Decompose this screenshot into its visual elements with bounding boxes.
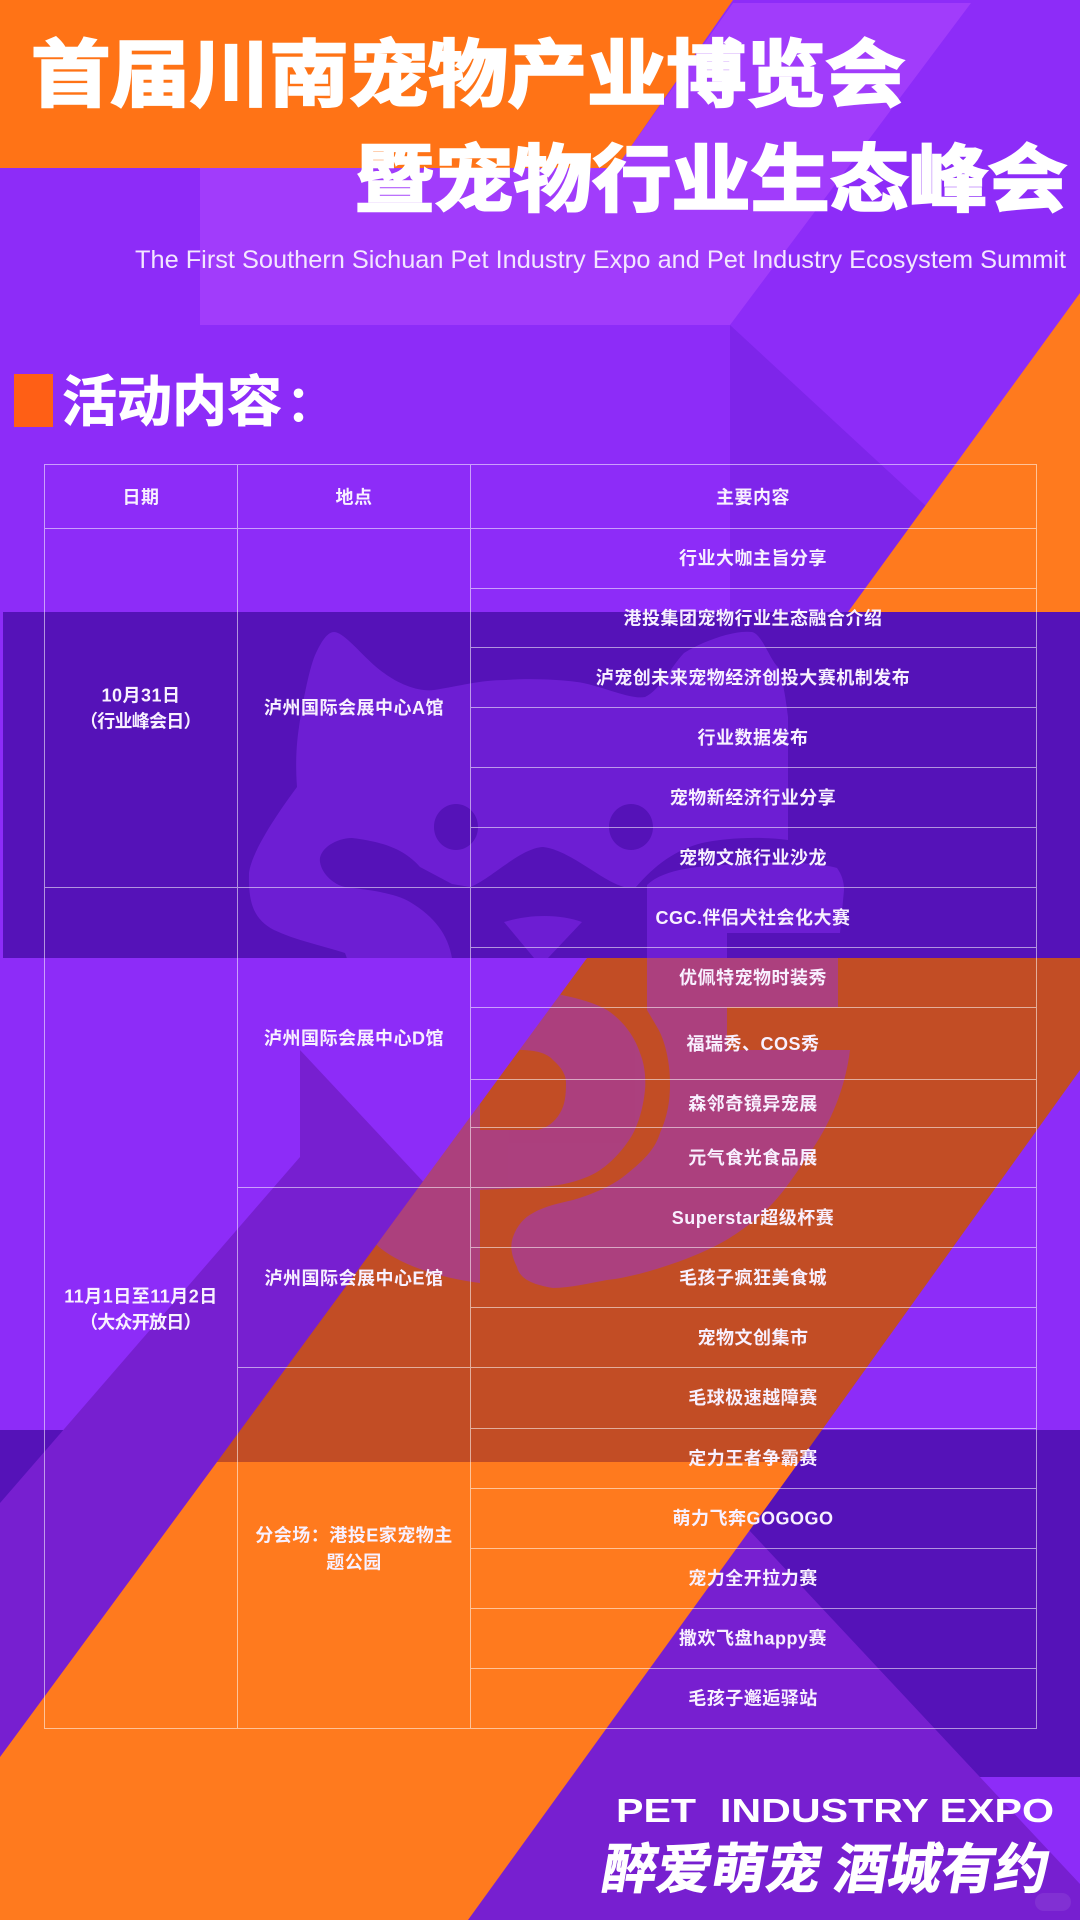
main content column xyxy=(596,548,910,1708)
main content column: 泸宠创未来宠物经济创投大赛机制发布 xyxy=(596,667,910,688)
main content column: 元气食光食品展 xyxy=(688,1147,818,1168)
table grid xyxy=(44,464,1036,1728)
header row: 主要内容 xyxy=(716,486,790,508)
main content column: 宠物文旅行业沙龙 xyxy=(679,847,827,868)
main content column: 毛球极速越障赛 xyxy=(688,1387,818,1408)
title xyxy=(31,35,1067,221)
main content column: 港投集团宠物行业生态融合介绍 xyxy=(624,608,882,628)
main content column: 森邻奇镜异宠展 xyxy=(688,1093,818,1114)
footer chinese slogan xyxy=(598,1839,1055,1900)
main content column: CGC.伴侣犬社会化大赛 xyxy=(656,907,850,928)
date column: （行业峰会日） xyxy=(80,712,202,732)
main content column: 撒欢飞盘happy赛 xyxy=(679,1628,827,1648)
main content column: 行业数据发布 xyxy=(698,727,808,748)
main content column: 优佩特宠物时装秀 xyxy=(679,967,827,988)
main content column: 定力王者争霸赛 xyxy=(688,1448,818,1468)
date column: （大众开放日） xyxy=(80,1312,202,1332)
footer english slogan: PET INDUSTRY EXPO xyxy=(616,1792,1054,1829)
venue column: 泸州国际会展中心A馆 xyxy=(264,697,444,718)
header row: 地点 xyxy=(336,488,372,508)
venue column: 泸州国际会展中心E馆 xyxy=(264,1268,444,1288)
watermark logo: cat and P xyxy=(249,632,850,1288)
icon: orange square xyxy=(14,374,53,427)
header row xyxy=(122,486,790,508)
subtitle: The First Southern Sichuan Pet Industry Expo and Pet Industry Ecosystem Summit xyxy=(135,246,1066,274)
venue column: 泸州国际会展中心D馆 xyxy=(264,1028,444,1048)
section heading xyxy=(14,371,336,433)
main content column: 福瑞秀、COS秀 xyxy=(686,1034,820,1054)
footer chinese slogan: 酒城有约 xyxy=(830,1839,1055,1900)
venue column xyxy=(255,697,453,1572)
main content column: 行业大咖主旨分享 xyxy=(679,548,827,568)
schedule table xyxy=(44,464,1036,1728)
venue column: 分会场：港投E家宠物主 xyxy=(255,1524,453,1546)
venue column: 题公园 xyxy=(326,1552,382,1572)
main content column: Superstar超级杯赛 xyxy=(672,1207,834,1228)
main content column: 毛孩子疯狂美食城 xyxy=(679,1267,827,1288)
main content column: 宠物文创集市 xyxy=(698,1327,808,1348)
title: 首届川南宠物产业博览会 xyxy=(31,35,905,116)
date column xyxy=(64,686,218,1332)
date column: 10月31日 xyxy=(101,686,181,706)
heading text: 活动内容 xyxy=(62,371,282,433)
footer chinese slogan: 醉爱萌宠 xyxy=(598,1839,827,1900)
main content column: 宠物新经济行业分享 xyxy=(670,787,836,808)
main content column: 毛孩子邂逅驿站 xyxy=(688,1688,818,1708)
main content column: 萌力飞奔GOGOGO xyxy=(672,1508,834,1528)
title: 暨宠物行业生态峰会 xyxy=(355,140,1067,221)
heading text: ： xyxy=(286,376,336,432)
main content column: 宠力全开拉力赛 xyxy=(688,1568,818,1588)
header row: 日期 xyxy=(122,488,160,508)
corner watermark badge xyxy=(1035,1893,1071,1911)
date column: 11月1日至11月2日 xyxy=(64,1286,218,1306)
